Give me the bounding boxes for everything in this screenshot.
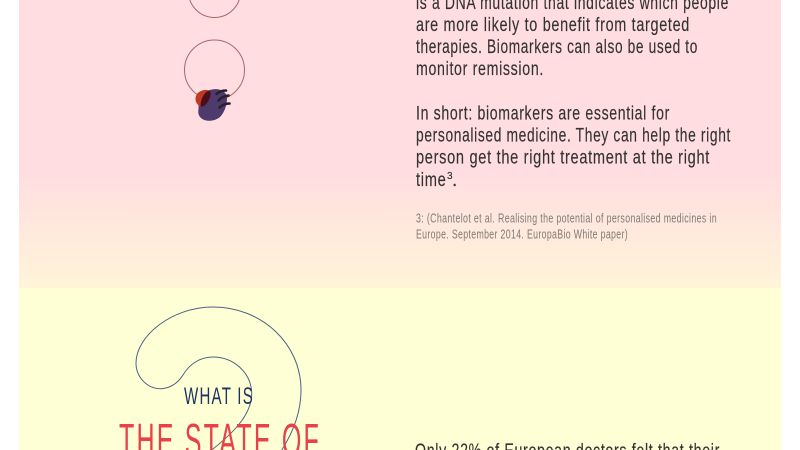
text block: in short summary: In short: biomarkers are essential for bbox=[416, 104, 670, 124]
text block: in short summary: person get the right treatment at the right bbox=[416, 148, 710, 168]
icon: upper outline circle bbox=[188, 0, 240, 18]
text block: biomarker explanation: monitor remission. bbox=[416, 59, 544, 80]
icon: cell circle with dark blob bbox=[184, 40, 244, 121]
panel: yellow section background bbox=[19, 288, 781, 450]
decorative question mark spiral bbox=[136, 307, 301, 450]
heading: what is: WHAT IS bbox=[184, 383, 254, 410]
text block: biomarker explanation bbox=[416, 0, 729, 80]
text block: biomarker explanation: are more likely to benefit from targeted bbox=[416, 15, 690, 36]
text block: in short summary: time bbox=[416, 170, 446, 191]
panel: pink to peach gradient band bbox=[19, 170, 781, 288]
panel: pink section background bbox=[19, 0, 781, 170]
text block: in short summary bbox=[416, 104, 731, 191]
footnote: Europe. September 2014. EuropaBio White paper) bbox=[416, 228, 628, 242]
text block: in short summary: . bbox=[452, 170, 457, 191]
text block: biomarker explanation: therapies. Biomarkers can also be used to bbox=[416, 37, 698, 58]
footnote bbox=[416, 212, 717, 242]
text block: in short summary: 3 bbox=[447, 171, 453, 182]
